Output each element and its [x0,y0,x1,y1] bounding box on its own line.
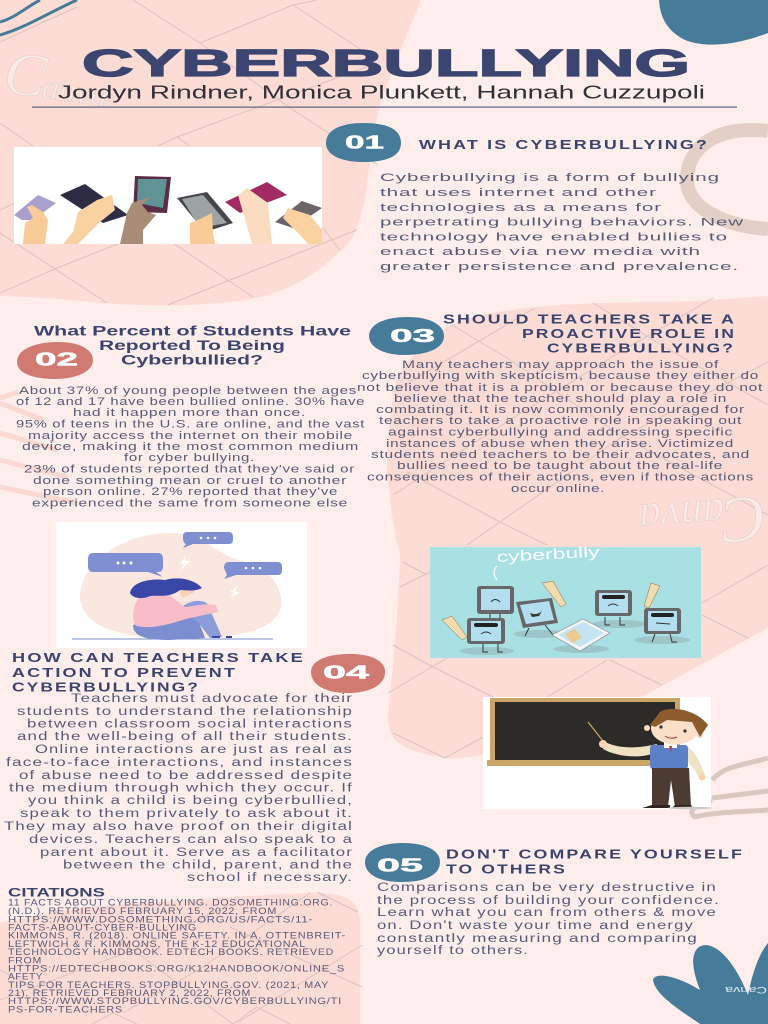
image: sad girl with speech bubbles [56,522,307,648]
body 03: believe that the teacher should play a role in [394,393,727,405]
body 02: majority access the internet on their mobile [28,430,353,442]
citations list: (N.D.). RETRIEVED FEBRUARY 15, 2022, FROM [8,906,277,916]
body 03: cyberbullying with skepticism, because they either do [362,370,759,382]
heading 01: WHAT IS CYBERBULLYING? [419,138,709,152]
body 05: on. Don't waste your time and energy [377,920,694,932]
citations list: HTTPS://WWW.DOSOMETHING.ORG/US/FACTS/11- [8,914,313,924]
body 01: that uses internet and other [380,187,657,199]
body 03: against cyberbullying and addressing specific [388,426,733,438]
body 03: students need teachers to be their advocates, and [371,449,750,461]
title: CYBERBULLYING [82,43,690,85]
body 04: They may also have proof on their digital [4,821,353,833]
number badge 03 [369,317,444,355]
body 04: Teachers must advocate for their [71,693,353,705]
body 05 [377,882,720,957]
number badge 01 [326,123,401,162]
decoration: tan scribble [692,758,768,817]
decoration: teal blob top right [659,0,768,45]
body 04: between the child, parent, and the [63,860,353,872]
citations list: FROM [8,956,42,966]
body 04: of abuse need to be addressed despite [19,770,353,782]
heading 05 [446,848,744,876]
number badge 02: 02 [35,350,78,370]
body 05: constantly measuring and comparing [377,933,698,945]
citations list: FACTS-ABOUT-CYBER-BULLYING [8,922,197,932]
panel: section 05 [365,697,744,957]
heading 02: Reported To Being [99,338,285,353]
number badge 01: 01 [345,132,384,152]
heading 03: CYBERBULLYING? [547,342,735,356]
body 02 [16,385,365,510]
body 04: speak to them privately to ask about it. [20,808,353,820]
body 02: 23% of students reported that they've said or [24,464,355,476]
citations list: TECHNOLOGY HANDBOOK. EDTECH BOOKS. RETRIEVED [8,947,334,957]
number badge 03: 03 [390,326,435,346]
body 03: Many teachers may approach the issue of [402,359,720,371]
body 01: enact abuse via new media with [380,246,701,258]
heading 02 [34,324,352,368]
body 04: devices. Teachers can also speak to a [29,834,353,846]
heading 04: CYBERBULLYING? [12,680,200,694]
body 03: combating it. It is now commonly encouraged for [376,404,745,416]
citations list: HTTPS://EDTECHBOOKS.ORG/K12HANDBOOK/ONLINE_S [8,964,345,974]
image: teacher at chalkboard [483,697,712,809]
watermark leaf: Canva [725,985,767,995]
image: cyberbully phones [430,544,701,658]
body 01: greater persistence and prevalence. [380,261,739,273]
body 02: had it happen more than once. [73,407,306,419]
citations list: 21). RETRIEVED FEBRUARY 2, 2022, FROM [8,988,251,998]
body 05: the process of building your confidence. [377,895,720,907]
heading 02: Cyberbullied? [121,352,263,368]
body 04 [4,693,353,884]
body 02: for cyber bullying. [124,452,255,464]
body 03 [357,359,763,495]
citations list: HTTPS://WWW.STOPBULLYING.GOV/CYBERBULLYING/TI [8,996,342,1006]
body 01: technologies as a means for [380,202,662,214]
body 02: experienced the same from someone else [32,498,348,510]
decoration: teal strokes top left [0,0,77,35]
body 03: bullies need to be taught about the real-life [397,460,723,472]
heading 04: ACTION TO PREVENT [12,666,237,680]
body 04: the medium through which they occur. If [9,782,353,794]
body 01: technology have enabled bullies to [380,232,728,244]
body 02: person online. 27% reported that they've [43,486,338,498]
decoration: tan ring [687,130,768,229]
panel: section 04 [4,651,385,884]
number badge 04 [311,654,385,693]
citations heading: CITATIONS [8,886,105,900]
citations list: AFETY [8,972,43,982]
body 04: parent about it. Serve as a facilitator [40,847,353,859]
body 01 [380,172,744,273]
body 01: Cyberbullying is a form of bullying [380,172,720,184]
decoration: left stripes [0,392,77,503]
panel: section 03 [357,312,763,658]
body 04: you think a child is being cyberbullied, [28,795,353,807]
panel: section 02 [16,324,365,648]
citations list: TIPS FOR TEACHERS. STOPBULLYING.GOV. (2021, MAY [8,980,329,990]
authors subtitle: Jordyn Rindner, Monica Plunkett, Hannah Cuzzupoli [58,82,705,102]
body 01: perpetrating bullying behaviors. New [380,216,744,228]
heading 03: SHOULD TEACHERS TAKE A [443,312,736,326]
citations list: KIMMONS, R. (2018). ONLINE SAFETY. IN A. OTTENBREIT- [8,930,346,940]
heading 05: TO OTHERS [446,862,567,876]
body 03: consequences of their actions, even if those actions [367,472,754,484]
watermark top left: Canva [0,39,114,121]
watermark mirrored: Canva [637,481,768,563]
body 05: Learn what you can from others & move [377,907,717,919]
citations list: PS-FOR-TEACHERS [8,1004,123,1014]
body 04: between classroom social interactions [27,718,353,730]
body 05: Comparisons can be very destructive in [377,882,717,894]
heading 03 [443,312,736,356]
body 03: teachers to take a proactive role in speaking out [379,415,742,427]
body 03: occur online. [511,483,605,495]
body 02: 95% of teens in the U.S. are online, and the vast [16,418,365,430]
heading 04: HOW CAN TEACHERS TAKE [12,651,305,665]
heading 03: PROACTIVE ROLE IN [522,327,736,341]
body 04: and the well-being of all their students. [17,731,353,743]
body 02: About 37% of young people between the ages [19,385,357,397]
image: cyberbully phones: cyberbully [496,544,601,566]
body 02: device, making it the most common medium [22,441,359,453]
panel: citations [8,886,346,1014]
body 04: school if necessary. [187,872,353,884]
image: hands holding phones [14,147,322,244]
body 04: students to understand the relationship [17,706,353,718]
heading 02: What Percent of Students Have [34,324,352,338]
citations list: LEFTWICH & R. KIMMONS, THE K-12 EDUCATIONAL [8,939,306,949]
body 04: Online interactions are just as real as [35,744,353,756]
number badge 02 [17,342,93,379]
body 03: instances of abuse when they arise. Victimized [386,438,734,450]
number badge 04: 04 [323,662,369,682]
citations list: 11 FACTS ABOUT CYBERBULLYING. DOSOMETHING.ORG. [8,898,333,908]
body 03: not believe that it is a problem or because they do not [357,382,763,394]
body 02: of 12 and 17 have been bullied online. 30% have [16,396,365,408]
panel: section 01 [14,123,744,273]
heading 05: DON'T COMPARE YOURSELF [446,848,744,862]
decoration: teal leaves [653,943,768,1024]
number badge 05 [365,843,440,882]
number badge 05: 05 [377,856,423,876]
body 05: yourself to others. [377,945,529,957]
heading 04 [12,651,305,694]
body 02: done something mean or cruel to another [33,475,347,487]
body 04: face-to-face interactions, and instances [6,757,353,769]
citations list [8,898,346,1014]
